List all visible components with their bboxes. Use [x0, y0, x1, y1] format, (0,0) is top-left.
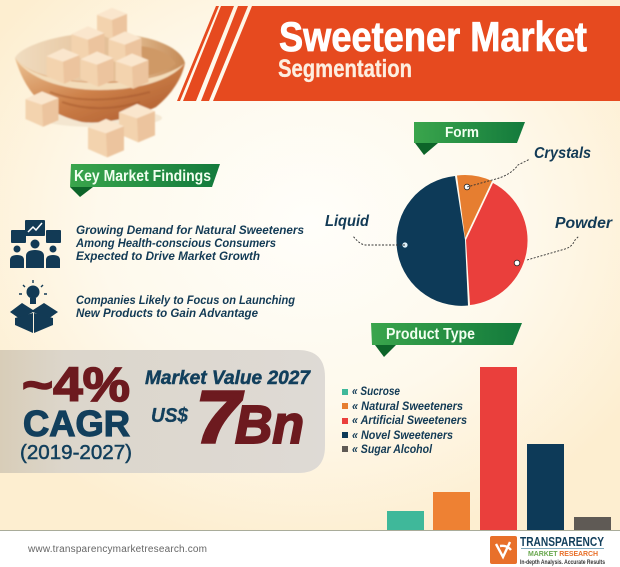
- illustration: bowl of sugar cubes: [15, 8, 185, 157]
- stat: period: (2019-2027): [20, 442, 132, 464]
- ribbon: key market findings: [70, 164, 220, 197]
- title banner: [177, 6, 620, 101]
- website url: www.transparencymarketresearch.com: [27, 544, 207, 555]
- logo tagline: In-depth Analysis. Accurate Results: [520, 560, 606, 566]
- stat: market value label: Market Value 2027: [145, 368, 311, 389]
- legend: product type: « Sucrose: [352, 384, 400, 398]
- text: finding two: New Products to Gain Advantage: [76, 306, 258, 320]
- leader lines: [353, 159, 579, 260]
- ribbon: form: [414, 122, 525, 155]
- stat: CAGR label: CAGR: [23, 403, 130, 444]
- bar chart: product type: [387, 367, 611, 530]
- legend: product type: [342, 384, 467, 456]
- stat: value seven: 7: [196, 377, 244, 458]
- text: finding one: Among Health-conscious Consumers: [75, 236, 276, 250]
- text: finding one: [75, 223, 304, 263]
- subheading: Segmentation: [278, 55, 412, 83]
- text: finding one: Growing Demand for Natural Sweeteners: [76, 223, 304, 237]
- text: finding one: Expected to Drive Market Growth: [76, 249, 260, 263]
- panel: CAGR and market value: [0, 350, 325, 473]
- label: powder: Powder: [555, 215, 613, 232]
- icon: box with light bulb: [10, 280, 58, 333]
- legend: product type: « Novel Sweeteners: [352, 428, 453, 442]
- legend: product type: « Artificial Sweeteners: [352, 413, 467, 427]
- ribbon: product type: Product Type: [386, 326, 475, 343]
- ribbon: product type: [371, 323, 522, 357]
- legend: product type: « Sugar Alcohol: [352, 442, 433, 456]
- stat: value unit: Bn: [235, 395, 304, 455]
- ribbon: form: Form: [445, 125, 479, 141]
- label: liquid: Liquid: [325, 213, 370, 230]
- slice: crystals: [457, 175, 492, 238]
- footer band: [0, 530, 620, 567]
- logo second line: MARKET RESEARCH: [528, 551, 598, 558]
- slice: liquid: [396, 176, 468, 306]
- stat: CAGR percent: ~4%: [22, 359, 130, 412]
- logo mark: [490, 536, 517, 564]
- label: crystals: Crystals: [534, 145, 591, 162]
- logo: transparency market research: [490, 534, 606, 566]
- text: finding two: Companies Likely to Focus on Launching: [76, 293, 296, 307]
- stat: currency: US$: [151, 405, 189, 427]
- pie chart: form: [396, 175, 528, 306]
- icon: people with chart: [10, 220, 61, 268]
- text: finding two: [76, 293, 296, 320]
- legend: product type: « Natural Sweeteners: [352, 399, 463, 413]
- ribbon: key market findings: Key Market Findings: [74, 168, 211, 185]
- slice: powder: [466, 183, 528, 305]
